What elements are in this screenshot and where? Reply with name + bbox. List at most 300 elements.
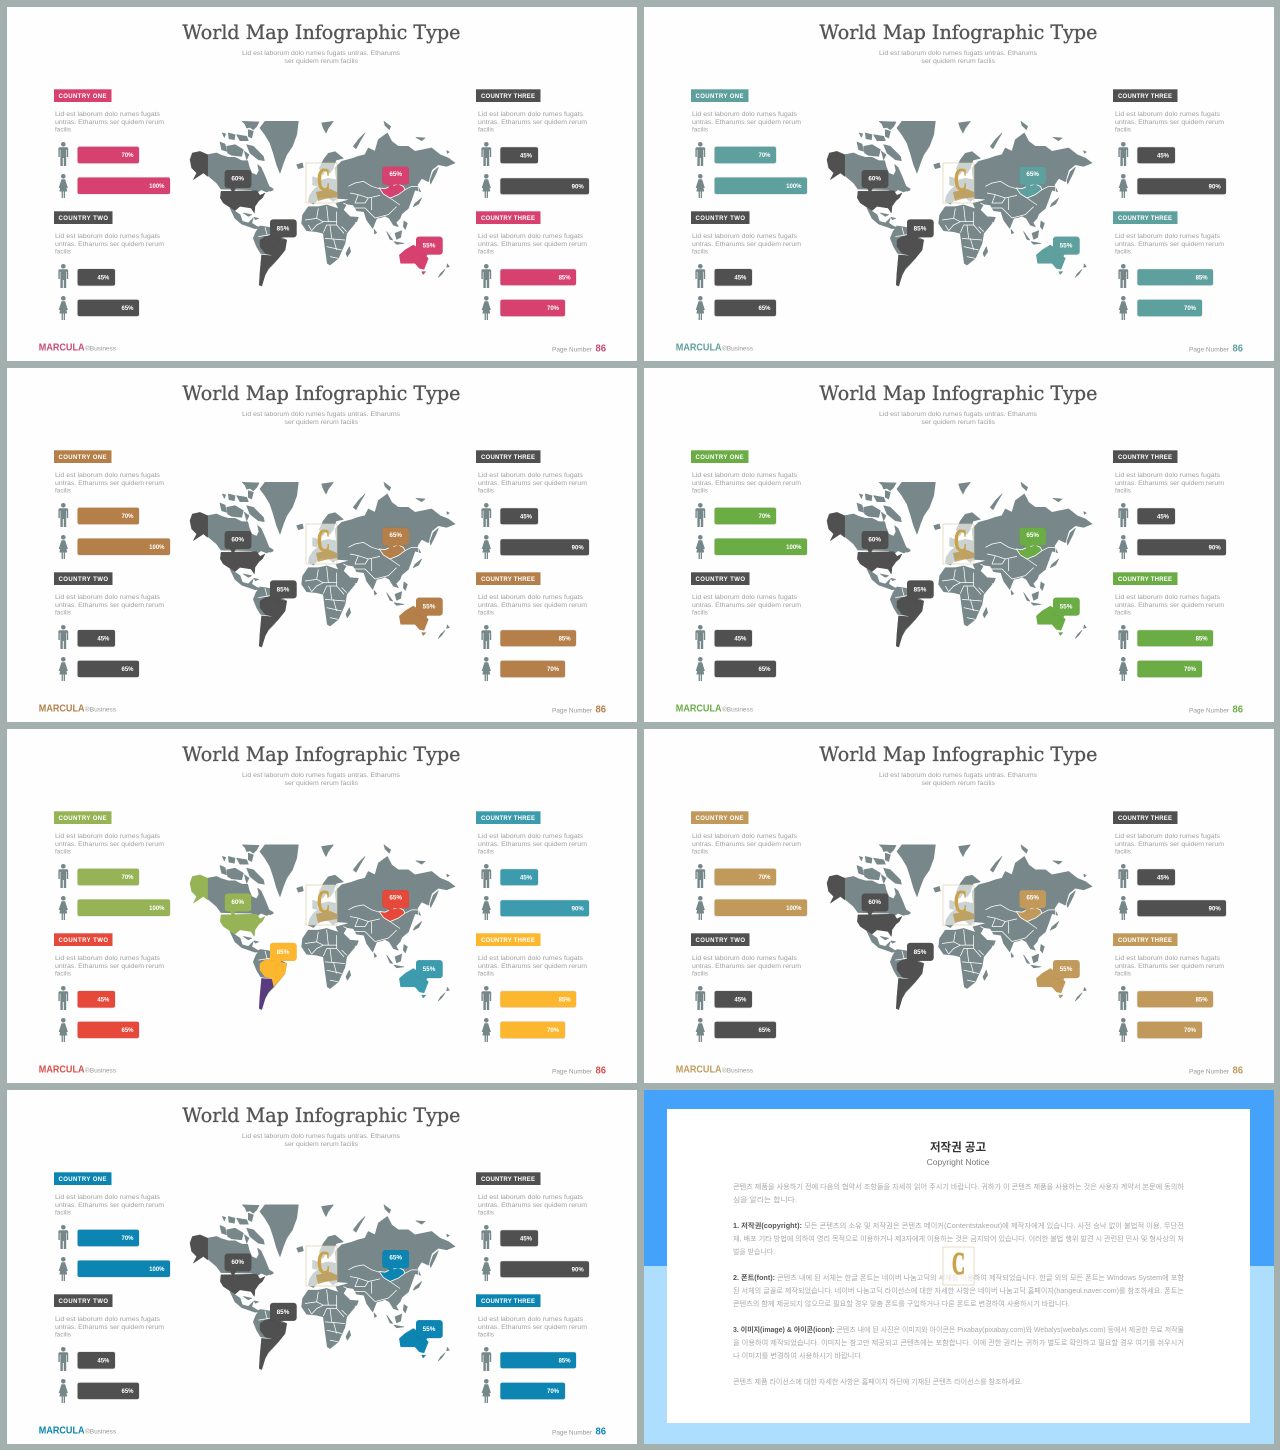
panel: tan slide — [644, 729, 1274, 1083]
footer: 86 — [1232, 1064, 1243, 1076]
country one block: facilis — [55, 848, 72, 856]
country three block bottom: Lid est laborum dolo rumes fugats — [478, 1316, 584, 1323]
title: World Map Infographic Type — [819, 20, 1097, 44]
country three block top: 90% — [1209, 546, 1221, 552]
footer: MARCULA — [39, 1064, 85, 1076]
world map: 55% — [423, 1326, 436, 1333]
subtitle: ser quidem rerum facilis — [922, 419, 996, 426]
world map: 60% — [231, 899, 244, 906]
country one block: 70% — [121, 875, 134, 881]
country two block: 65% — [758, 1028, 771, 1034]
country three block bottom: untras. Etharums ser quidem rerum — [478, 602, 587, 609]
world map: 65% — [1026, 894, 1039, 901]
country two block — [54, 1294, 164, 1403]
world map: 85% — [914, 226, 927, 233]
clause 3 image and icon: 3. 이미지(image) & 아이콘(icon): 콘텐츠 내에 된 사진은 이미지와 아이콘은 Pixabay(pixabay.com)와 Webalys(webalys.com) 등에서 제공한 무료 저작물 — [733, 1325, 1185, 1334]
country three block bottom — [1113, 933, 1224, 1042]
country three block bottom: facilis — [1115, 610, 1132, 616]
country three block bottom: 85% — [559, 998, 571, 1004]
country one block — [691, 89, 807, 198]
country two block: facilis — [692, 610, 709, 616]
country one block: COUNTRY ONE — [696, 816, 744, 822]
country three block top: 90% — [572, 906, 584, 912]
country three block top: 45% — [520, 876, 533, 882]
country one block: 100% — [786, 906, 802, 912]
intro paragraph: 콘텐츠 제품을 사용하기 전에 다음의 협약서 조항들을 자세히 읽어 주시기 바랍니다. 귀하가 이 콘텐츠 제품을 사용하는 것은 사용자 계약서 본문에 동의하 — [733, 1182, 1185, 1191]
country one block: facilis — [692, 126, 709, 134]
country three block bottom — [1113, 572, 1224, 681]
footer: Page Number — [552, 1069, 593, 1076]
country three block top: untras. Etharums ser quidem rerum — [478, 119, 587, 126]
country one block: 100% — [786, 545, 802, 551]
country one block: untras. Etharums ser quidem rerum — [55, 1202, 164, 1209]
footer: MARCULA — [39, 342, 85, 354]
country three block top: Lid est laborum dolo rumes fugats — [1115, 472, 1221, 479]
world map: 85% — [277, 587, 290, 594]
country one block: facilis — [692, 848, 709, 856]
intro paragraph — [733, 1182, 1185, 1204]
country two block: untras. Etharums ser quidem rerum — [55, 1324, 164, 1331]
country two block: Lid est laborum dolo rumes fugats — [692, 594, 798, 601]
country three block top: 90% — [1209, 906, 1221, 912]
world map: 60% — [868, 176, 881, 183]
world map: 60% — [231, 176, 244, 183]
watermark: C — [317, 1244, 330, 1280]
country three block bottom — [476, 572, 587, 681]
subtitle — [879, 772, 1038, 787]
panel: copyright notice — [644, 1090, 1274, 1444]
footer — [676, 342, 1243, 354]
footer: MARCULA — [39, 1424, 85, 1436]
country two block: COUNTRY TWO — [696, 938, 745, 944]
country two block: Lid est laborum dolo rumes fugats — [55, 1316, 161, 1323]
footer: Page Number — [1189, 347, 1230, 354]
clause 3 image and icon: 나 이미지를 변경하여 사용하시기 바랍니다. — [733, 1351, 863, 1360]
country two block — [691, 933, 801, 1042]
country three block bottom: 70% — [1184, 667, 1197, 673]
world map: 65% — [389, 171, 402, 178]
country two block: untras. Etharums ser quidem rerum — [55, 963, 164, 970]
country three block top — [476, 1172, 589, 1281]
world map: 55% — [1060, 966, 1073, 973]
footer: Page Number — [1189, 708, 1230, 715]
footer: MARCULA — [676, 342, 722, 354]
country two block: facilis — [55, 248, 72, 256]
country three block top: facilis — [1115, 488, 1132, 494]
country three block bottom: COUNTRY THREE — [481, 1299, 535, 1305]
country two block — [691, 211, 801, 320]
clause 1 copyright: 1. 저작권(copyright): 모든 콘텐츠의 소유 및 저작권은 콘텐츠 메이커(Contentstakeout)에 제작자에게 있습니다. 사전 승낙 없이 불법적 이용, 무단전 — [733, 1221, 1184, 1230]
subtitle: ser quidem rerum facilis — [922, 58, 996, 65]
country three block top: 90% — [572, 546, 584, 552]
footer: ®Business — [85, 1066, 117, 1074]
country one block — [54, 811, 170, 920]
watermark: C — [954, 161, 967, 197]
country two block: untras. Etharums ser quidem rerum — [692, 963, 801, 970]
subtitle: ser quidem rerum facilis — [922, 780, 996, 787]
country two block: facilis — [692, 970, 709, 978]
subtitle: Lid est laborum dolo rumes fugats untras. Etharums — [242, 772, 401, 779]
world map: 55% — [423, 603, 436, 610]
country three block top: COUNTRY THREE — [481, 816, 535, 822]
country two block: facilis — [55, 970, 72, 978]
country two block: 45% — [734, 998, 747, 1004]
footer: 86 — [1232, 704, 1243, 716]
country three block top — [1113, 811, 1226, 920]
footer — [39, 1424, 606, 1438]
country three block top: COUNTRY THREE — [1118, 816, 1172, 822]
country two block: COUNTRY TWO — [58, 938, 108, 944]
country three block bottom: 70% — [547, 667, 560, 673]
country three block top: 45% — [520, 1236, 533, 1242]
country one block: 100% — [786, 184, 802, 190]
title: World Map Infographic Type — [182, 381, 460, 405]
world map: 60% — [868, 899, 881, 906]
country two block: Lid est laborum dolo rumes fugats — [692, 955, 798, 962]
country three block bottom — [476, 1294, 587, 1403]
country three block top: facilis — [1115, 126, 1132, 134]
country one block: Lid est laborum dolo rumes fugats — [55, 1194, 161, 1201]
country one block: untras. Etharums ser quidem rerum — [55, 841, 164, 848]
watermark — [306, 883, 337, 925]
clause 2 font — [733, 1273, 1185, 1308]
country three block top: untras. Etharums ser quidem rerum — [1115, 480, 1224, 487]
country one block: untras. Etharums ser quidem rerum — [55, 480, 164, 487]
subtitle: ser quidem rerum facilis — [284, 419, 359, 426]
country three block top: Lid est laborum dolo rumes fugats — [478, 111, 584, 118]
country three block top: COUNTRY THREE — [481, 455, 535, 461]
country one block — [54, 89, 170, 198]
world map — [190, 845, 455, 1009]
country three block bottom: 70% — [1184, 1028, 1197, 1034]
country three block bottom: Lid est laborum dolo rumes fugats — [1115, 955, 1221, 962]
country three block top — [1113, 450, 1226, 559]
world map: 65% — [389, 894, 402, 901]
country one block: Lid est laborum dolo rumes fugats — [692, 833, 798, 840]
country three block bottom — [476, 933, 587, 1042]
country three block top: untras. Etharums ser quidem rerum — [1115, 119, 1224, 126]
country three block bottom: Lid est laborum dolo rumes fugats — [478, 594, 584, 601]
country two block: Lid est laborum dolo rumes fugats — [692, 233, 798, 240]
country three block bottom: 85% — [1196, 998, 1208, 1004]
watermark — [943, 883, 974, 925]
title: World Map Infographic Type — [819, 742, 1097, 766]
country two block: Lid est laborum dolo rumes fugats — [55, 233, 161, 240]
country one block: Lid est laborum dolo rumes fugats — [692, 472, 798, 479]
clause 2 font: 2. 폰트(font): 콘텐츠 내에 된 서체는 한글 폰트는 네이버 나눔고딕의 서체를 이용하여 제작되었습니다. 한글 외의 모든 폰트는 Windows System에 포함 — [733, 1273, 1185, 1282]
country three block bottom: 70% — [547, 1028, 560, 1034]
country three block bottom: COUNTRY THREE — [481, 216, 535, 222]
watermark: C — [954, 883, 967, 919]
world map — [190, 1205, 455, 1369]
country three block top: Lid est laborum dolo rumes fugats — [478, 472, 584, 479]
world map — [190, 482, 455, 647]
watermark — [306, 161, 337, 203]
country one block: COUNTRY ONE — [58, 1177, 106, 1183]
country one block: untras. Etharums ser quidem rerum — [692, 841, 801, 848]
country two block: 65% — [121, 306, 134, 312]
footer: ®Business — [85, 1428, 117, 1436]
country three block top: facilis — [478, 848, 495, 856]
country one block — [54, 450, 170, 559]
country three block bottom: 85% — [559, 636, 571, 642]
world map: 60% — [231, 1259, 244, 1266]
country two block: 45% — [97, 1358, 110, 1364]
panel: teal slide — [644, 7, 1274, 361]
country two block: 65% — [121, 667, 134, 673]
country one block: Lid est laborum dolo rumes fugats — [55, 833, 161, 840]
country three block top: facilis — [478, 1210, 495, 1216]
world map — [827, 845, 1092, 1009]
world map: 65% — [1026, 171, 1039, 178]
country two block: 45% — [734, 276, 747, 282]
country three block top: facilis — [1115, 848, 1132, 856]
world map — [190, 121, 455, 286]
country two block: COUNTRY TWO — [696, 577, 745, 583]
country one block: 70% — [758, 514, 771, 520]
country one block: untras. Etharums ser quidem rerum — [692, 119, 801, 126]
country one block: untras. Etharums ser quidem rerum — [55, 119, 164, 126]
copyright subheading: Copyright Notice — [927, 1157, 990, 1167]
country three block top: COUNTRY THREE — [481, 94, 535, 100]
country two block: untras. Etharums ser quidem rerum — [55, 602, 164, 609]
country one block: COUNTRY ONE — [58, 816, 106, 822]
country three block top — [476, 811, 589, 920]
country one block — [691, 811, 807, 920]
country three block top: untras. Etharums ser quidem rerum — [478, 841, 587, 848]
subtitle — [879, 411, 1038, 426]
footer: 86 — [596, 1064, 606, 1076]
watermark: C — [317, 161, 330, 197]
country three block bottom: 85% — [559, 276, 571, 282]
country three block top: facilis — [478, 126, 495, 134]
country three block bottom: untras. Etharums ser quidem rerum — [478, 963, 587, 970]
subtitle: Lid est laborum dolo rumes fugats untras. Etharums — [242, 411, 401, 418]
country three block top: 45% — [520, 514, 533, 520]
country three block bottom: untras. Etharums ser quidem rerum — [478, 241, 587, 248]
country three block bottom: untras. Etharums ser quidem rerum — [1115, 963, 1224, 970]
country three block top: untras. Etharums ser quidem rerum — [1115, 841, 1224, 848]
footer: 86 — [596, 704, 606, 716]
country three block top: Lid est laborum dolo rumes fugats — [478, 1194, 584, 1201]
world map: 65% — [389, 1254, 402, 1261]
country three block top: COUNTRY THREE — [1118, 455, 1172, 461]
subtitle — [879, 50, 1038, 65]
watermark — [306, 522, 337, 564]
clause 2 font: 콘텐츠의 함께 제공되지 않으므로 필요할 경우 맞춤 폰트를 구입하거나 다른 폰트로 변경하여 사용하시기 바랍니다. — [733, 1299, 1070, 1308]
country one block: COUNTRY ONE — [58, 455, 106, 461]
world map — [827, 121, 1092, 286]
world map: 60% — [231, 537, 244, 544]
footer — [39, 702, 606, 716]
country two block — [691, 572, 801, 681]
footer: MARCULA — [676, 702, 722, 714]
country three block bottom — [1113, 211, 1224, 320]
country two block: Lid est laborum dolo rumes fugats — [55, 955, 161, 962]
country three block bottom: facilis — [478, 248, 495, 256]
country two block: 45% — [97, 636, 110, 642]
country one block: untras. Etharums ser quidem rerum — [692, 480, 801, 487]
country one block: Lid est laborum dolo rumes fugats — [692, 111, 798, 118]
closing line: 콘텐츠 제품 라이선스에 대한 자세한 사항은 홈페이지 하단에 기재된 콘텐츠 라이선스를 참조하세요. — [733, 1377, 1023, 1386]
subtitle: Lid est laborum dolo rumes fugats untras. Etharums — [879, 411, 1038, 418]
panel: multicolour slide — [7, 729, 637, 1083]
country one block — [691, 450, 807, 559]
country three block bottom: facilis — [478, 1332, 495, 1338]
footer — [39, 1064, 606, 1076]
country two block: COUNTRY TWO — [58, 1299, 108, 1305]
clause 3 image and icon — [733, 1325, 1185, 1360]
country one block: COUNTRY ONE — [696, 94, 744, 100]
country one block: COUNTRY ONE — [58, 94, 106, 100]
country three block bottom: Lid est laborum dolo rumes fugats — [478, 233, 584, 240]
panel: green slide — [644, 368, 1274, 722]
title: World Map Infographic Type — [182, 1103, 460, 1127]
country three block top: Lid est laborum dolo rumes fugats — [478, 833, 584, 840]
clause 1 copyright: 재, 배포 기타 방법에 의하여 영리 목적으로 이용하거나 제3자에게 이용하는 것은 금지되어 있습니다. 이러한 불법 행위 발견 시 관련된 민사 및 형사상의 처 — [733, 1234, 1184, 1243]
country three block top — [1113, 89, 1226, 198]
footer: MARCULA — [676, 1064, 722, 1076]
country one block: 70% — [758, 153, 771, 159]
watermark — [943, 1245, 974, 1285]
country three block top: facilis — [478, 488, 495, 494]
country three block bottom: COUNTRY THREE — [1118, 938, 1172, 944]
footer — [39, 342, 606, 354]
country one block: facilis — [692, 488, 709, 494]
country three block top: 90% — [1209, 184, 1221, 190]
world map: 60% — [868, 537, 881, 544]
country three block top: untras. Etharums ser quidem rerum — [478, 1202, 587, 1209]
watermark: C — [317, 522, 330, 558]
watermark — [943, 522, 974, 564]
subtitle: Lid est laborum dolo rumes fugats untras. Etharums — [879, 772, 1038, 779]
footer — [676, 1064, 1243, 1076]
country two block: COUNTRY TWO — [58, 577, 108, 583]
country three block bottom: Lid est laborum dolo rumes fugats — [478, 955, 584, 962]
country two block: facilis — [55, 610, 72, 616]
country three block bottom: 70% — [547, 306, 560, 312]
country three block top: 45% — [1157, 876, 1170, 882]
clause 2 font: 된 서체의 글꼴로 제작되었습니다. 네이버 나눔고딕 라이선스에 대한 자세한 사항은 네이버 나눔고딕 홈페이지(hangeul.naver.com)를 참조하세요. 폰트는 — [733, 1286, 1185, 1295]
subtitle — [242, 411, 401, 426]
country two block: untras. Etharums ser quidem rerum — [55, 241, 164, 248]
title: World Map Infographic Type — [182, 20, 460, 44]
world map: 85% — [277, 1309, 290, 1316]
footer: MARCULA — [39, 702, 85, 714]
country one block — [54, 1172, 170, 1281]
footer — [676, 702, 1243, 716]
footer: 86 — [596, 1426, 606, 1438]
country one block: 100% — [149, 906, 165, 912]
country three block bottom — [476, 211, 587, 320]
country three block top: 90% — [572, 184, 584, 190]
country three block bottom: COUNTRY THREE — [481, 938, 535, 944]
country one block: facilis — [55, 488, 72, 494]
clause 1 copyright — [733, 1221, 1184, 1256]
footer: Page Number — [552, 347, 593, 354]
country three block bottom: Lid est laborum dolo rumes fugats — [1115, 594, 1221, 601]
country two block: 45% — [734, 636, 747, 642]
intro paragraph: 심을 알리는 합니다. — [733, 1195, 797, 1204]
panel: pink slide — [7, 7, 637, 361]
subtitle: ser quidem rerum facilis — [284, 58, 359, 65]
country two block: facilis — [55, 1332, 72, 1338]
country three block bottom: Lid est laborum dolo rumes fugats — [1115, 233, 1221, 240]
country two block: COUNTRY TWO — [58, 216, 108, 222]
country three block top: 45% — [1157, 514, 1170, 520]
subtitle: Lid est laborum dolo rumes fugats untras. Etharums — [879, 50, 1038, 57]
country two block: 45% — [97, 276, 110, 282]
world map: 85% — [914, 587, 927, 594]
world map: 55% — [423, 966, 436, 973]
watermark — [943, 161, 974, 203]
watermark: C — [317, 883, 330, 919]
footer: 86 — [596, 342, 606, 354]
footer: ®Business — [722, 344, 754, 352]
footer: ®Business — [722, 1066, 754, 1074]
country two block: untras. Etharums ser quidem rerum — [692, 602, 801, 609]
country two block — [54, 933, 164, 1042]
country two block: Lid est laborum dolo rumes fugats — [55, 594, 161, 601]
country three block bottom: COUNTRY THREE — [481, 577, 535, 583]
country two block: 65% — [121, 1389, 134, 1395]
watermark — [306, 1244, 337, 1286]
country three block bottom: 70% — [547, 1389, 560, 1395]
country three block bottom: 85% — [559, 1358, 571, 1364]
country two block: COUNTRY TWO — [696, 216, 745, 222]
subtitle: ser quidem rerum facilis — [284, 780, 359, 787]
footer: 86 — [1232, 342, 1243, 354]
country three block bottom: COUNTRY THREE — [1118, 577, 1172, 583]
watermark: C — [954, 522, 967, 558]
country one block: Lid est laborum dolo rumes fugats — [55, 472, 161, 479]
country three block top: COUNTRY THREE — [1118, 94, 1172, 100]
country one block: COUNTRY ONE — [696, 455, 744, 461]
country three block top: COUNTRY THREE — [481, 1177, 535, 1183]
world map: 55% — [1060, 603, 1073, 610]
country three block bottom: 85% — [1196, 636, 1208, 642]
footer: Page Number — [552, 708, 593, 715]
world map — [827, 482, 1092, 647]
country one block: Lid est laborum dolo rumes fugats — [55, 111, 161, 118]
country one block: 100% — [149, 184, 165, 190]
footer: ®Business — [85, 706, 117, 714]
country three block top: 45% — [520, 154, 533, 160]
world map: 55% — [1060, 242, 1073, 249]
country one block: 100% — [149, 1267, 165, 1273]
subtitle: Lid est laborum dolo rumes fugats untras. Etharums — [242, 50, 401, 57]
title: World Map Infographic Type — [819, 381, 1097, 405]
country three block bottom: untras. Etharums ser quidem rerum — [478, 1324, 587, 1331]
subtitle — [242, 1133, 401, 1148]
country three block bottom: facilis — [1115, 970, 1132, 978]
country two block: 65% — [121, 1028, 134, 1034]
country one block: 70% — [121, 514, 134, 520]
country three block top: Lid est laborum dolo rumes fugats — [1115, 111, 1221, 118]
world map: 65% — [1026, 532, 1039, 539]
country two block: 65% — [758, 306, 771, 312]
world map: 85% — [914, 949, 927, 956]
country one block: 70% — [758, 875, 771, 881]
country three block top: 90% — [572, 1268, 584, 1274]
footer: Page Number — [1189, 1069, 1230, 1076]
country three block bottom: untras. Etharums ser quidem rerum — [1115, 241, 1224, 248]
panel: brown slide — [7, 368, 637, 722]
country one block: 70% — [121, 1236, 134, 1242]
watermark: C — [952, 1245, 965, 1281]
subtitle — [242, 772, 401, 787]
subtitle: Lid est laborum dolo rumes fugats untras. Etharums — [242, 1133, 401, 1140]
